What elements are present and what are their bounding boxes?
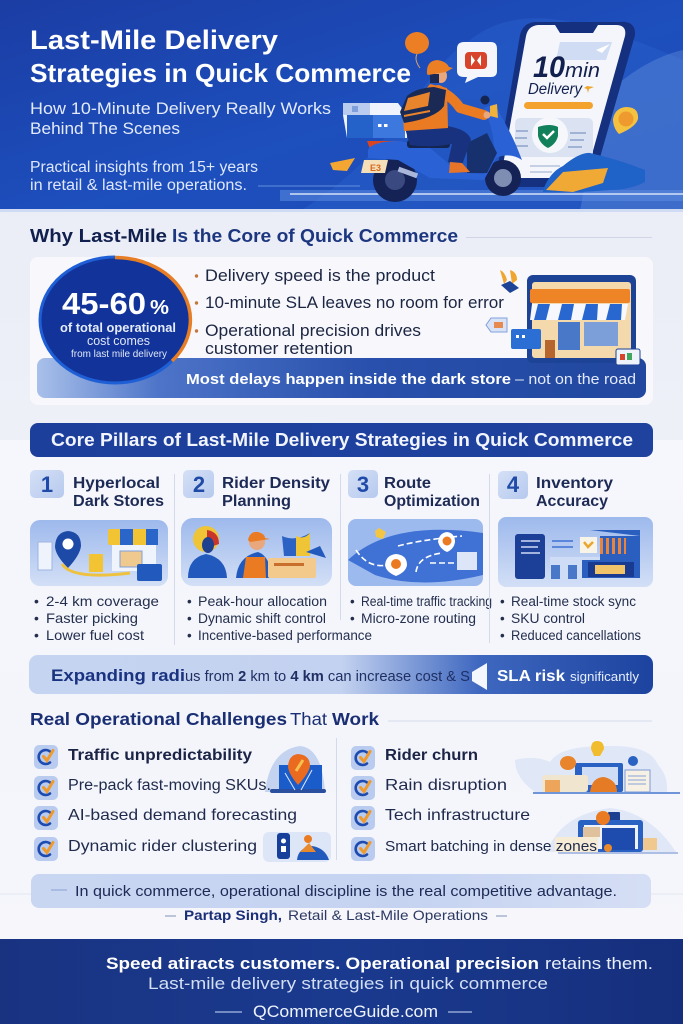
- challenge: traffic unpredictability: [34, 745, 252, 769]
- bullet list: Lower fuel cost: [46, 627, 144, 643]
- heading: why last-mile: Is the Core of Quick Commerce: [172, 226, 458, 246]
- illustration: riders: [181, 518, 332, 586]
- heading: real operational challenges: Real Operational Challenges: [30, 709, 287, 729]
- challenge: traffic unpredictability: Traffic unpredictability: [68, 747, 252, 764]
- backpack: [400, 87, 446, 123]
- icon: dark store: [486, 270, 640, 365]
- callout bar: dark store delays: Most delays happen inside the dark store: [186, 372, 511, 388]
- bullet list: Real-time traffic tracking: [361, 594, 492, 609]
- icon: parcel in front of phone: [543, 153, 645, 192]
- number tile 1: 1: [41, 472, 53, 497]
- challenge: rain disruption: Rain disruption: [385, 777, 507, 794]
- banner: core pillars: Core Pillars of Last-Mile Delivery Strategies in Quick Commerce: [51, 430, 633, 450]
- attribution: Retail & Last-Mile Operations: [288, 907, 488, 923]
- number tile 4: 4: [507, 472, 520, 497]
- pillar heading: Route: [384, 475, 431, 492]
- stat circle: 45-60%: [40, 257, 190, 383]
- icon: smartphone with 10 min delivery: Delivery: [528, 81, 583, 98]
- bullet list: •: [350, 611, 355, 626]
- heading: real operational challenges: That: [290, 709, 327, 729]
- challenge: rider clustering: [34, 837, 257, 861]
- panel: pillar 1 hyperlocal dark stores: [30, 470, 168, 643]
- bullet list: Real-time stock sync: [511, 594, 636, 609]
- pillar heading: Rider Density: [222, 475, 330, 492]
- bullet list: why last-mile: Delivery speed is the product: [205, 267, 435, 285]
- number tile 4: [498, 471, 528, 499]
- icon: map pin on laptop: [265, 746, 326, 793]
- bullet list: why last-mile: customer retention: [205, 340, 353, 358]
- bullet list: Incentive-based performance: [198, 628, 372, 643]
- bullet list: 2-4 km coverage: [46, 593, 159, 609]
- pillar heading: [384, 475, 480, 510]
- challenge: pre-pack SKUs: Pre-pack fast-moving SKUs.: [68, 777, 271, 794]
- experience note: [30, 159, 258, 194]
- challenge: tech infrastructure: [351, 806, 530, 830]
- challenge: tech infrastructure: Tech infrastructure: [385, 807, 530, 824]
- bullet list: Peak-hour allocation: [198, 594, 327, 609]
- challenge: rain disruption: [351, 776, 507, 800]
- illustration: dark store pin: [30, 520, 168, 586]
- pillar heading: Hyperlocal: [73, 475, 160, 492]
- subtitle: Behind The Scenes: [30, 119, 180, 138]
- icon: balloon: [405, 32, 429, 68]
- challenge: rider churn: [351, 746, 478, 770]
- number tile 2: [183, 470, 214, 498]
- panel: pillar 2 rider density planning: [181, 470, 372, 643]
- bullet list: Reduced cancellations: [511, 628, 641, 643]
- bullet list: •: [187, 594, 192, 609]
- challenge: smart batching: [351, 837, 597, 861]
- bullet list: •: [34, 627, 39, 643]
- experience note: in retail & last-mile operations.: [30, 177, 247, 194]
- icon: delivery workstation: [547, 808, 678, 854]
- subtitle: [30, 99, 331, 138]
- bullet list: Micro-zone routing: [361, 611, 476, 626]
- icon: speed arrow: [330, 158, 355, 171]
- icon: smartphone with 10 min delivery: 10: [533, 51, 565, 84]
- bullet list: SKU control: [511, 611, 585, 626]
- license plate: [361, 160, 388, 173]
- title: [30, 25, 411, 88]
- bullet list: •: [34, 593, 39, 609]
- bullet list: •: [187, 611, 192, 626]
- callout bar: dark store delays: – not on the road: [515, 372, 636, 388]
- license plate: E3: [370, 163, 381, 173]
- bullet list: [500, 594, 641, 643]
- number tile 3: [348, 470, 378, 498]
- panel: hero header: [0, 0, 683, 212]
- pillar heading: Dark Stores: [73, 493, 164, 510]
- callout: radius warning: us from 2 km to 4 km can increase cost & S: [185, 668, 470, 685]
- bullet list: [350, 594, 492, 626]
- pillar heading: [536, 475, 613, 510]
- wheels: [373, 158, 417, 202]
- callout: radius warning: significantly: [570, 670, 640, 684]
- title: Last-Mile Delivery: [30, 25, 278, 55]
- panel: pillar 4 inventory accuracy: [498, 471, 653, 643]
- tail light: [367, 141, 398, 149]
- bullet list: •: [187, 628, 192, 643]
- experience note: Practical insights from 15+ years: [30, 159, 258, 176]
- bullet list: why last-mile: Operational precision drives: [205, 322, 421, 340]
- bullet list: Dynamic shift control: [198, 611, 326, 626]
- challenge: rider clustering: Dynamic rider clustering: [68, 838, 257, 855]
- challenge: rider churn: Rider churn: [385, 747, 478, 764]
- attribution: Partap Singh,: [184, 907, 282, 923]
- closing statement: Speed atiracts customers. Operational precision: [106, 954, 539, 973]
- banner: core pillars: [30, 423, 653, 457]
- icon: delivery rider on scooter: [343, 60, 522, 202]
- pillar heading: [73, 475, 164, 510]
- bullet list: Faster picking: [46, 610, 138, 626]
- icon: delivery desk: [515, 741, 680, 794]
- stat circle: 45-60%: of total operational: [60, 321, 176, 335]
- number tile 1: [30, 470, 64, 498]
- stat circle: 45-60%: 45-60: [62, 286, 146, 321]
- callout: radius warning: SLA risk: [497, 668, 565, 685]
- stat circle: 45-60%: %: [150, 297, 169, 319]
- heading: real operational challenges: [30, 709, 652, 729]
- panel: pillar 3 route optimization: [348, 470, 492, 626]
- scooter body: [368, 104, 522, 180]
- icon: smartphone with 10 min delivery: [498, 22, 635, 187]
- icon: smartphone with 10 min delivery: min: [565, 60, 600, 82]
- title: Strategies in Quick Commerce: [30, 58, 411, 88]
- challenge: demand forecasting: [34, 806, 297, 830]
- illustration: route map: [348, 519, 483, 586]
- pillar heading: [222, 475, 330, 510]
- challenge: pre-pack SKUs: [34, 776, 271, 800]
- pillar heading: Planning: [222, 493, 291, 510]
- panel: why last-mile card: [30, 257, 653, 405]
- subtitle: How 10-Minute Delivery Really Works: [30, 99, 331, 118]
- bullet list: why last-mile: [195, 267, 505, 358]
- number tile 3: 3: [357, 472, 369, 497]
- pillar heading: Optimization: [384, 493, 480, 510]
- closing statement: retains them.: [545, 954, 653, 973]
- panel: challenges right column: [351, 741, 680, 861]
- callout: radius warning: [29, 655, 653, 694]
- heading: why last-mile: Why Last-Mile: [30, 226, 167, 246]
- icon: scooter rider at station: [263, 832, 331, 862]
- rider head and helmet: [427, 60, 453, 83]
- callout bar: dark store delays: [37, 358, 646, 398]
- stat circle: 45-60%: from last mile delivery: [71, 348, 168, 360]
- rider torso and arm: [403, 84, 490, 131]
- stat circle: 45-60%: cost comes: [87, 334, 150, 348]
- attribution: [165, 907, 507, 923]
- icon: megaphone: [472, 663, 487, 690]
- callout: radius warning: Expanding radi: [51, 667, 185, 685]
- heading: real operational challenges: Work: [332, 709, 379, 729]
- quote banner: [31, 874, 651, 908]
- panel: challenges left column: [34, 745, 331, 862]
- bullet list: •: [500, 628, 505, 643]
- heading: why last-mile: [30, 226, 652, 246]
- bullet list: •: [500, 594, 505, 609]
- icon: location pin: [613, 107, 638, 134]
- bullet list: •: [350, 594, 355, 609]
- website: QCommerceGuide.com: [253, 1003, 438, 1021]
- delivery box: [343, 103, 407, 138]
- challenge: demand forecasting: AI-based demand forecasting: [68, 807, 297, 824]
- footer subtitle: Last-mile delivery strategies in quick commerce: [148, 974, 548, 993]
- rider legs: [404, 125, 471, 165]
- number tile 2: 2: [193, 472, 205, 497]
- pillar heading: Accuracy: [536, 493, 608, 510]
- illustration: inventory system: [498, 517, 653, 587]
- quote banner: In quick commerce, operational discipline is the real competitive advantage.: [75, 883, 617, 900]
- pillar heading: Inventory: [536, 475, 613, 492]
- bullet list: why last-mile: 10-minute SLA leaves no room for error: [205, 294, 505, 312]
- challenge: smart batching: Smart batching in dense zones: [385, 839, 597, 855]
- panel: footer: [0, 939, 683, 1024]
- handlebar and headlight: [480, 96, 498, 118]
- bullet list: [34, 593, 159, 643]
- bullet list: •: [500, 611, 505, 626]
- icon: speech bubble: [457, 42, 497, 83]
- bullet list: [187, 594, 372, 643]
- bullet list: •: [34, 610, 39, 626]
